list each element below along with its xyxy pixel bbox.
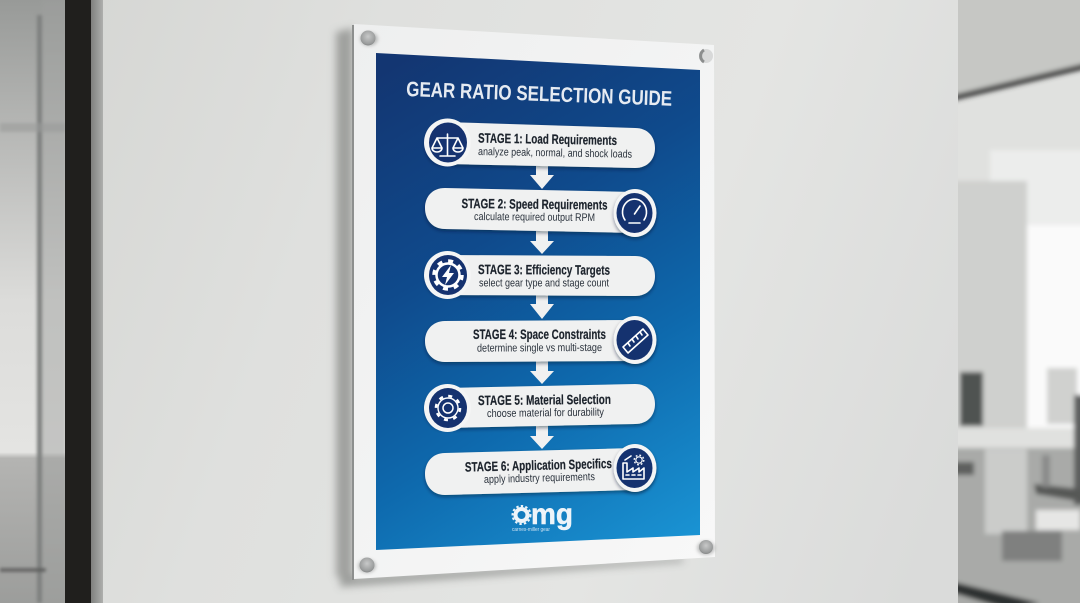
stage 2 heading: STAGE 2: Speed Requirements — [461, 196, 608, 213]
logo: carnes-miller gear — [512, 498, 573, 533]
screw: bottom right — [697, 540, 715, 555]
panel: stage 3 — [424, 251, 655, 299]
background: left blurred office — [0, 0, 66, 603]
arrow: stage 5 to 6 — [530, 424, 554, 449]
screw: top left — [360, 30, 378, 46]
pill — [425, 255, 655, 296]
pill — [425, 448, 655, 495]
stage 6 heading: STAGE 6: Application Specifics — [465, 456, 612, 475]
panel: stage 6 — [425, 444, 656, 495]
icon: balance scale — [424, 118, 471, 166]
screw: top right — [699, 49, 713, 63]
arrow: stage 4 to 5 — [530, 361, 554, 384]
stage 3 heading: STAGE 3: Efficiency Targets — [478, 262, 610, 278]
logo: carnes-miller gear: mg — [531, 498, 573, 531]
background: right blurred office — [958, 0, 1080, 603]
stage 1 heading: STAGE 1: Load Requirements — [478, 131, 617, 148]
panel: blue poster — [376, 53, 700, 550]
pill — [425, 320, 655, 362]
icon: ruler — [614, 316, 656, 364]
stage 1 description: analyze peak, normal, and shock loads — [478, 146, 633, 161]
acrylic mounting panel — [352, 24, 715, 580]
icon: speedometer — [614, 189, 656, 237]
panel: stage 5 — [424, 384, 655, 432]
pill — [425, 384, 655, 428]
stage 6 description: apply industry requirements — [484, 471, 595, 486]
pill — [425, 122, 655, 168]
icon: factory with gear — [614, 444, 656, 492]
stage 4 description: determine single vs multi-stage — [477, 342, 602, 355]
pill — [425, 188, 655, 233]
stage 5 description: choose material for durability — [487, 407, 604, 420]
logo: carnes-miller gear: carnes-miller gear — [512, 527, 550, 533]
panel: stage 2 — [425, 188, 656, 237]
background: black door frame — [65, 0, 103, 603]
arrow: stage 1 to 2 — [530, 166, 554, 189]
stage 5 heading: STAGE 5: Material Selection — [478, 392, 611, 408]
icon: gear with lightning bolt — [424, 251, 471, 299]
stage 4 heading: STAGE 4: Space Constraints — [473, 327, 606, 342]
title: GEAR RATIO SELECTION GUIDE — [406, 78, 672, 111]
poster shadow — [336, 28, 683, 587]
panel: stage 4 — [425, 316, 656, 364]
arrow: stage 2 to 3 — [530, 231, 554, 254]
stage 3 description: select gear type and stage count — [479, 278, 609, 290]
panel: stage 1 — [424, 118, 655, 168]
icon: gear — [424, 384, 471, 432]
stage 2 description: calculate required output RPM — [474, 211, 595, 224]
screw: bottom left — [358, 558, 376, 573]
arrow: stage 3 to 4 — [530, 295, 554, 319]
